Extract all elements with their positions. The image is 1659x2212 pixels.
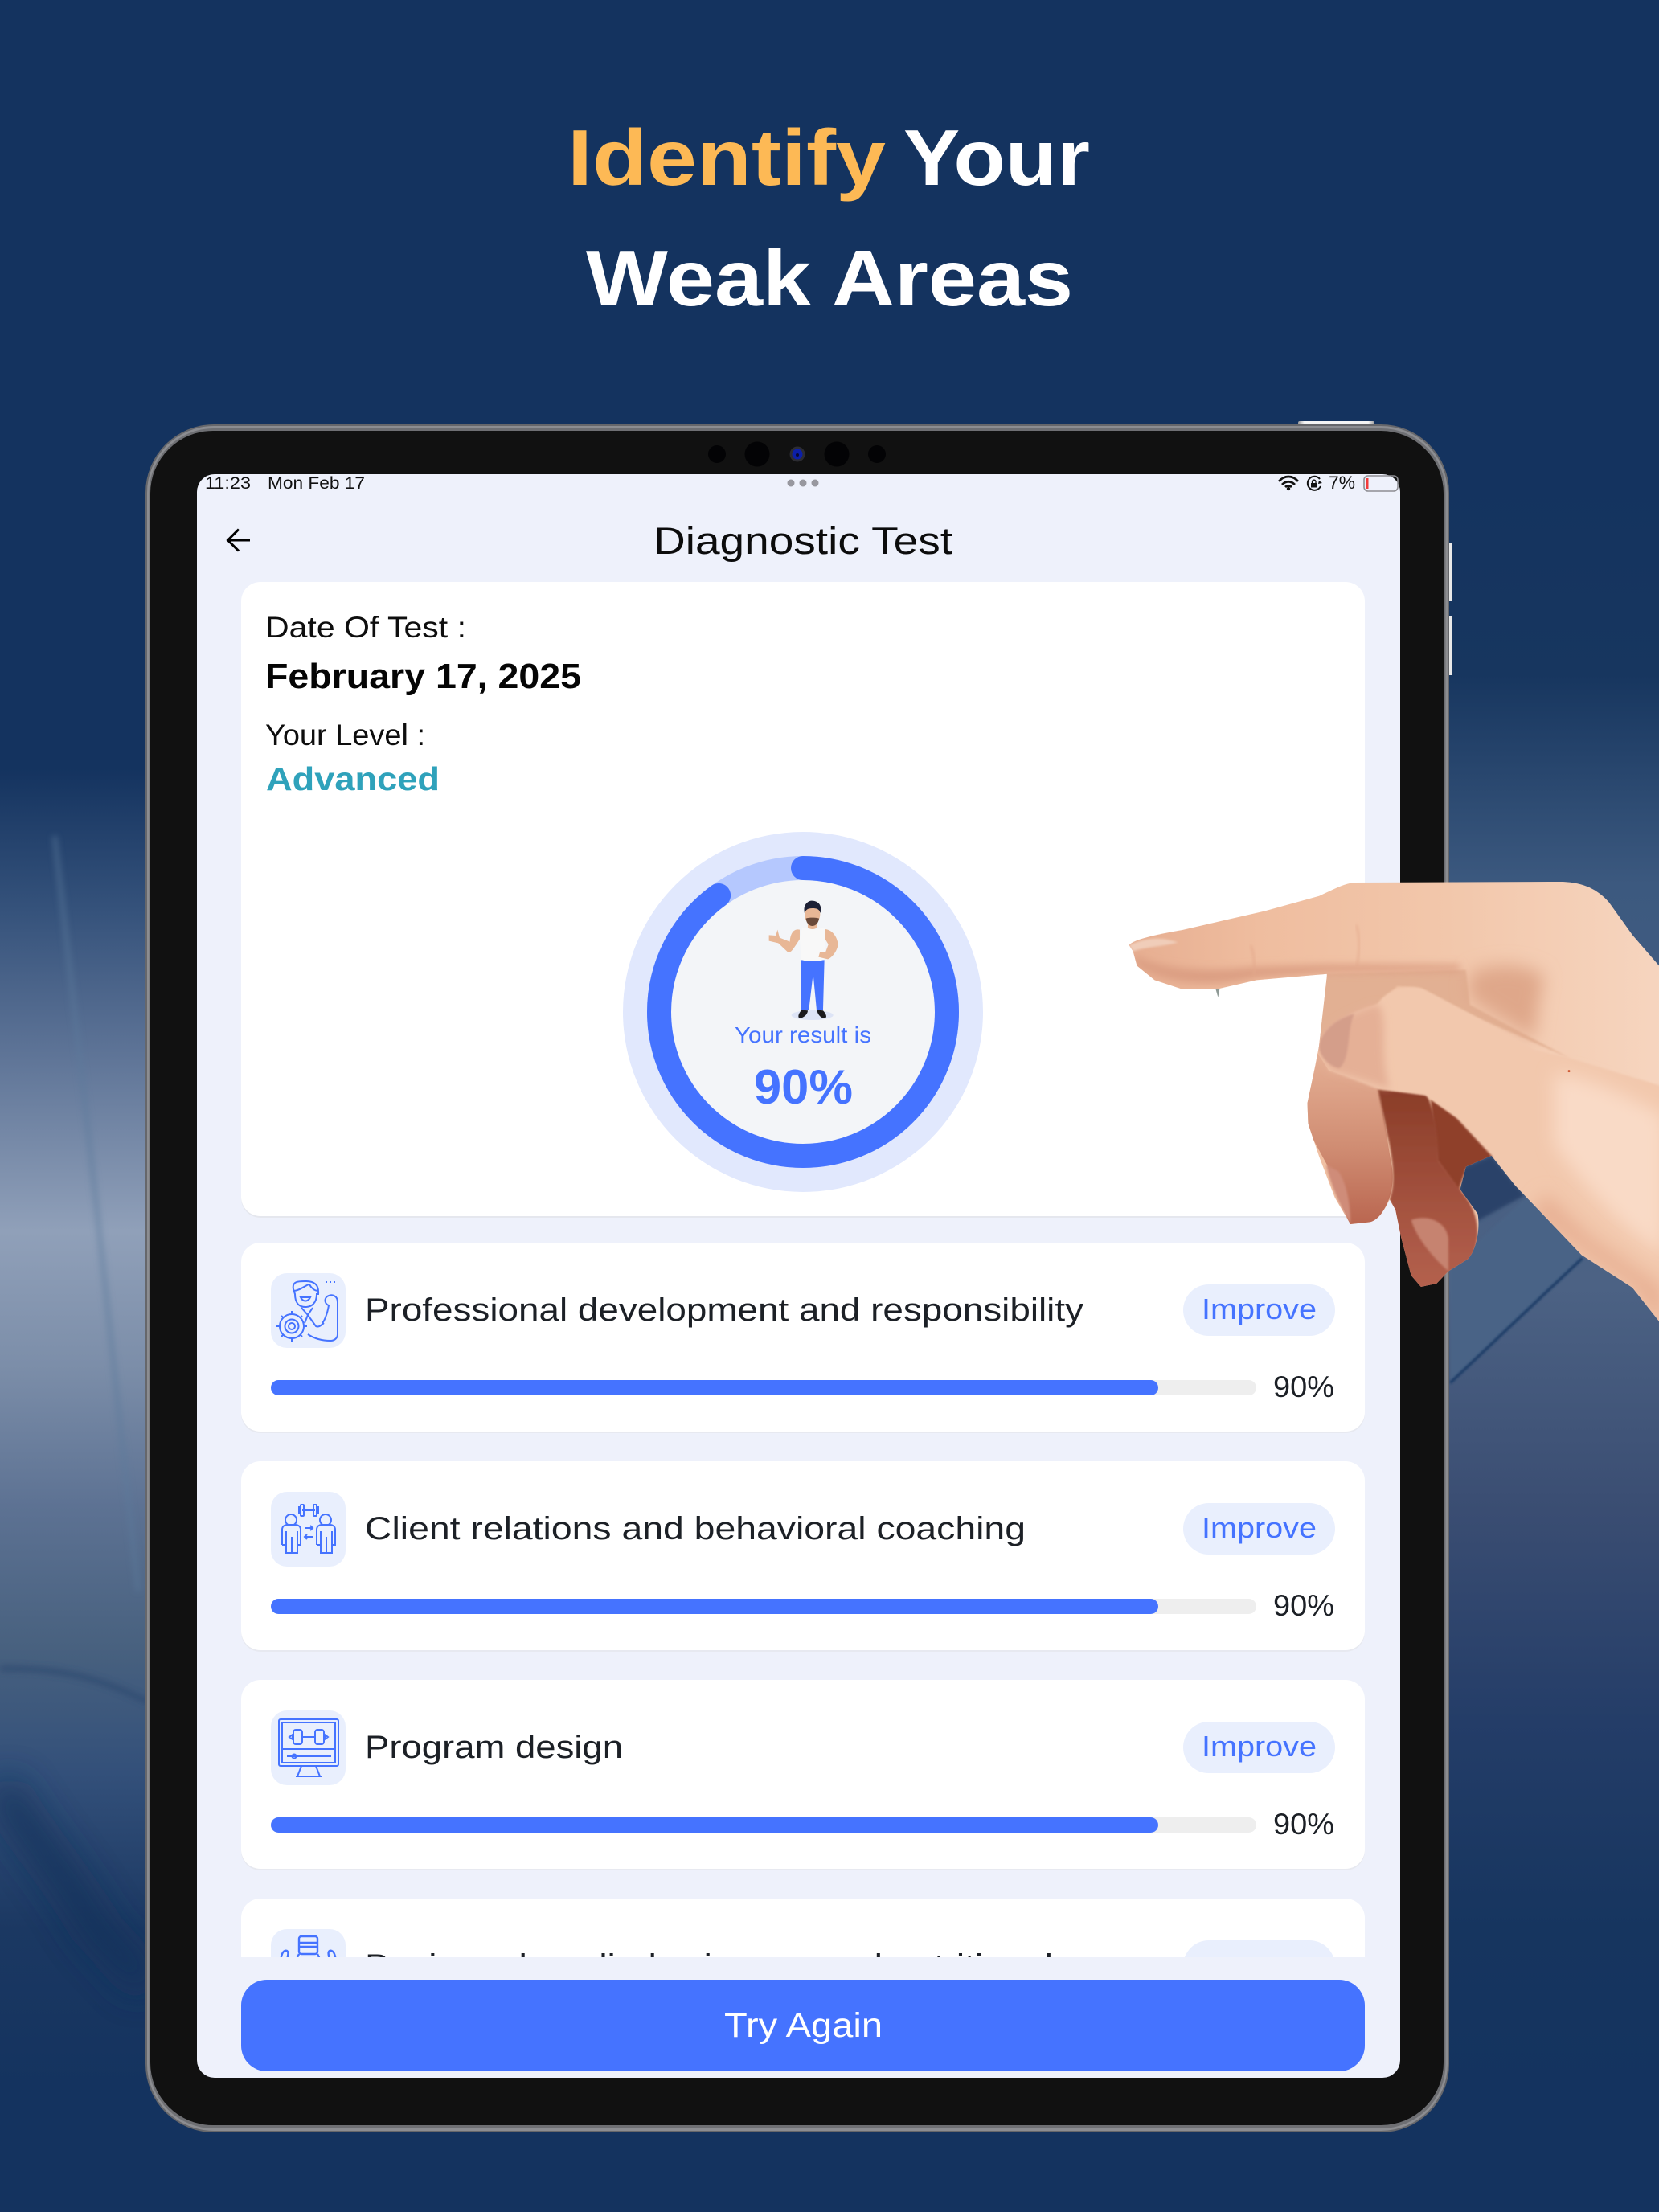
- row label: Professional development and responsibility: [365, 1292, 1083, 1328]
- result donut chart: [623, 832, 983, 1192]
- row label: Client relations and behavioral coaching: [365, 1511, 1026, 1546]
- percentage: 90%: [1273, 1808, 1334, 1841]
- icon: monitor with dumbbell: [271, 1710, 346, 1785]
- status bar: 7%: [1329, 473, 1355, 493]
- illustration: fit man thumbs up: [769, 901, 838, 1020]
- icon: trainer with gear and bicep: [271, 1273, 346, 1348]
- cutout sliver: [1215, 989, 1219, 997]
- camera array: [708, 442, 886, 466]
- improve button: [1183, 1284, 1335, 1336]
- status bar: [205, 473, 1398, 493]
- improve button: Improve: [1202, 1511, 1317, 1544]
- improve button: Improve: [1202, 1730, 1317, 1763]
- try again button: Try Again: [724, 2006, 883, 2045]
- app screen: [197, 473, 1400, 2087]
- improve button: [1183, 1722, 1335, 1773]
- title: Identify: [567, 113, 886, 202]
- thumbnail: [1319, 1014, 1354, 1068]
- result value: 90%: [754, 1060, 853, 1114]
- progress bar: [271, 1380, 1256, 1395]
- tablet device frame: [145, 421, 1452, 2132]
- icon: two people and dumbbell: [271, 1492, 346, 1567]
- icon: supplement bottle: [271, 1929, 346, 1957]
- ring finger: [1307, 1050, 1393, 1227]
- percentage: 90%: [1273, 1370, 1334, 1403]
- status bar: 11:23: [205, 474, 251, 493]
- title: Your: [903, 113, 1090, 202]
- title: Weak Areas: [586, 234, 1073, 322]
- panel: partially hidden nutrition row: [241, 1899, 1365, 1957]
- ring fingernail: [1326, 1165, 1350, 1223]
- thumb and back of hand: [1317, 987, 1659, 1329]
- illustration: hand pointing at screen: [1123, 874, 1659, 1329]
- try again button: [241, 1980, 1365, 2071]
- improve button: Improve: [1202, 1292, 1317, 1325]
- improve button: [1185, 1940, 1333, 1957]
- panel: professional development row: [241, 1243, 1365, 1433]
- index finger shading: [1135, 956, 1460, 984]
- result label: Your result is: [735, 1022, 871, 1047]
- progress bar: [271, 1817, 1256, 1833]
- skin mark: [1568, 1070, 1570, 1072]
- panel: program design row: [241, 1680, 1365, 1870]
- middle fingernail: [1411, 1218, 1448, 1272]
- back arrow icon: [228, 529, 250, 551]
- progress bar: [271, 1599, 1256, 1614]
- row label: Program design: [365, 1730, 623, 1765]
- pinky finger: [1431, 1099, 1495, 1191]
- date value: February 17, 2025: [265, 657, 581, 696]
- date label: Date Of Test :: [265, 611, 466, 644]
- status bar: Mon Feb 17: [268, 474, 365, 493]
- improve button: [1183, 1503, 1335, 1555]
- middle finger: [1378, 1089, 1477, 1290]
- percentage: 90%: [1273, 1589, 1334, 1622]
- screen heading: Diagnostic Test: [653, 519, 952, 562]
- level value: Advanced: [266, 760, 440, 797]
- shaded palm between index and thumb: [1319, 970, 1570, 1058]
- panel: test summary card: [241, 582, 1365, 1218]
- panel: client relations row: [241, 1461, 1365, 1652]
- row label: Basic and applied sciences and nutritional: [365, 1948, 1053, 1984]
- title: [567, 113, 1090, 322]
- level label: Your Level :: [265, 719, 425, 752]
